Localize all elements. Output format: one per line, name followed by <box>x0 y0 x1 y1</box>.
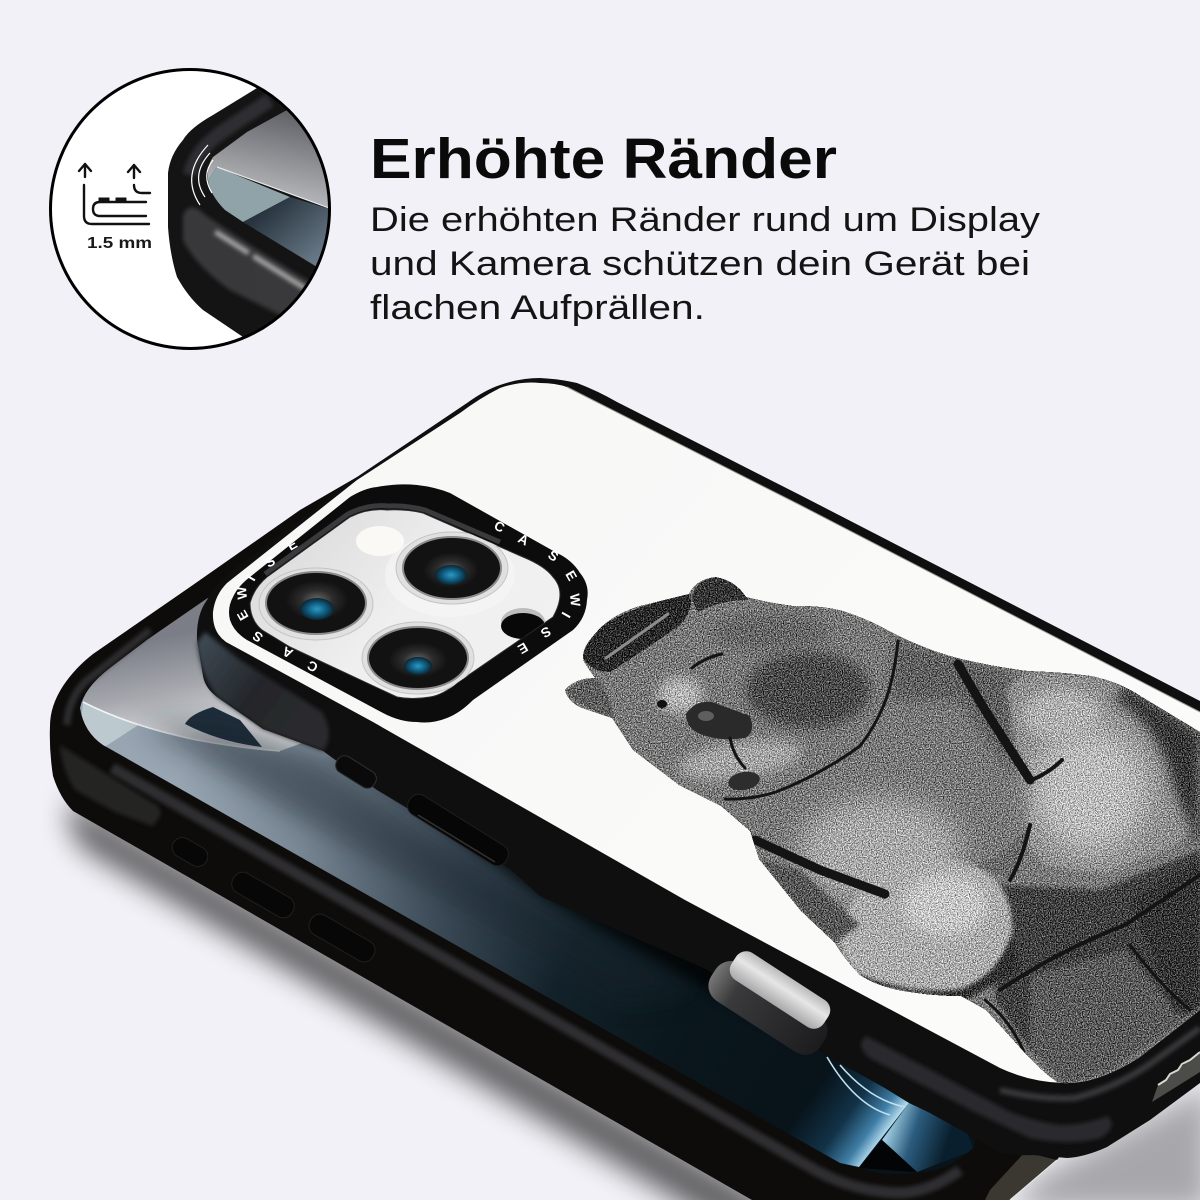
lower torso <box>759 859 860 943</box>
light arcs <box>827 1057 905 1115</box>
forearm light <box>903 875 987 935</box>
muzzle light <box>658 677 702 713</box>
mute switch <box>333 753 379 791</box>
rim highlight <box>112 768 960 1193</box>
lower leg grain <box>1030 950 1185 1085</box>
case back panel <box>213 383 1200 1083</box>
screen gray <box>208 90 340 212</box>
forehead <box>710 614 830 650</box>
upper arm shadow <box>1115 685 1200 850</box>
camera window <box>250 510 560 698</box>
camera module <box>229 484 588 722</box>
pipe bowl <box>727 769 761 793</box>
body text: flachen Aufprällen. <box>370 289 705 327</box>
heading: Erhöhte Ränder <box>370 127 837 191</box>
screen wallpaper dark hump <box>185 707 262 747</box>
pipe stem <box>730 738 745 768</box>
upper arm top light <box>1022 689 1102 741</box>
screen dark <box>243 197 340 275</box>
lidar sensor dark <box>501 613 545 639</box>
flash <box>356 526 404 556</box>
back screen <box>80 598 976 1174</box>
camera ring <box>229 484 588 722</box>
button volume up <box>228 868 298 922</box>
lidar sensor <box>501 608 545 636</box>
carbon patch left corner <box>60 745 160 826</box>
gray edge line <box>567 387 1200 712</box>
body text: Die erhöhten Ränder rund um Display <box>370 201 1040 239</box>
nose light <box>698 711 714 721</box>
front case rim <box>197 378 1200 1158</box>
carbon patch right corner <box>861 1036 1112 1142</box>
screen wallpaper upper wedge <box>84 598 302 751</box>
nose <box>686 702 752 739</box>
back phone in case <box>50 477 1100 1200</box>
cuff <box>976 828 1027 880</box>
lens bottom <box>362 622 474 694</box>
serrated charging highlight <box>1152 1052 1200 1102</box>
strap upper <box>958 664 1030 780</box>
phone shadow <box>69 800 1200 1200</box>
bear line details <box>606 614 1200 1052</box>
ring gloss <box>265 506 500 574</box>
power button highlight <box>418 815 495 862</box>
shoulder <box>890 640 1015 780</box>
upper arm light <box>1032 728 1148 852</box>
screen light wedge <box>208 167 290 222</box>
cheek light <box>676 734 804 786</box>
lens left <box>259 568 373 640</box>
icon: raised edge diagram <box>79 164 150 224</box>
silver button socket <box>702 954 834 1062</box>
blue highlight right <box>882 1103 974 1172</box>
metal edge bottom right <box>985 1152 1057 1200</box>
swoosh line <box>83 702 280 751</box>
light line <box>217 167 340 212</box>
power button <box>404 790 512 870</box>
eye right <box>692 654 722 668</box>
legs dark <box>995 850 1200 1060</box>
eye left <box>657 700 667 708</box>
collar line <box>725 641 898 799</box>
serration light <box>1158 1052 1200 1085</box>
highlights <box>217 233 303 287</box>
black triangle <box>859 1140 917 1172</box>
CASEWISE brand bottom: CASEWISE <box>234 536 320 675</box>
right leg darker <box>1130 860 1200 1012</box>
chest <box>798 798 962 902</box>
side button small <box>169 834 379 966</box>
lens top <box>396 532 508 604</box>
impact arcs <box>192 145 213 205</box>
knee crease <box>985 945 1190 1052</box>
circle outline <box>50 70 330 348</box>
ear top <box>692 577 748 612</box>
hat <box>581 594 691 672</box>
upper band <box>190 100 270 175</box>
ear left <box>565 678 614 718</box>
button volume down <box>305 910 379 966</box>
head dark side <box>746 652 870 728</box>
top rim highlight <box>67 630 150 725</box>
back case rim <box>50 477 1100 1200</box>
dimension label: 1.5 mm <box>87 235 152 252</box>
strap lower <box>755 840 885 894</box>
body text <box>370 201 1040 327</box>
body text: und Kamera schützen dein Gerät bei <box>370 245 1030 283</box>
CASEWISE brand top: CASEWISE <box>492 518 583 657</box>
crease arm <box>1000 760 1200 990</box>
front phone case <box>197 378 1200 1158</box>
bear base <box>550 560 1200 1100</box>
blue highlight left <box>792 1050 909 1167</box>
inset circle: raised edge detail <box>50 60 350 360</box>
bear illustration <box>550 560 1200 1100</box>
upper arm shape <box>1007 672 1200 873</box>
forearm shadow <box>860 935 1020 1000</box>
silver button <box>725 947 835 1033</box>
lens plate <box>385 533 515 617</box>
screen wallpaper light wedge <box>82 703 138 746</box>
metal edge line <box>1010 1160 1057 1200</box>
hat band <box>606 614 668 658</box>
circle base <box>50 69 330 349</box>
rim gloss <box>1000 1028 1200 1098</box>
dark blur next to front phone <box>138 704 547 938</box>
rim band <box>183 208 315 320</box>
camera corner bump patch <box>197 632 329 751</box>
forearm <box>838 858 1012 992</box>
case corner <box>168 60 350 360</box>
